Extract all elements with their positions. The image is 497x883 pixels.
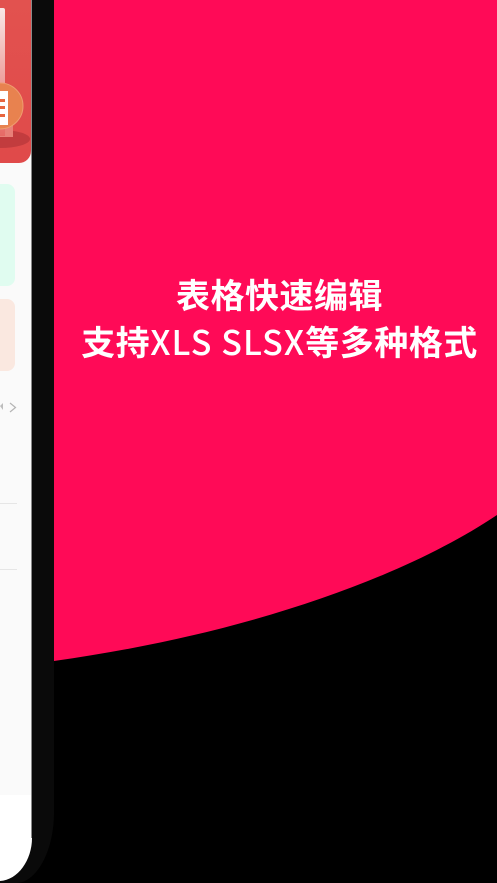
list divider (0, 569, 17, 570)
screen background (0, 0, 31, 795)
document stand (0, 120, 13, 137)
list divider (0, 503, 17, 504)
spreadsheet glyph (0, 91, 8, 125)
chevron icon (10, 403, 16, 412)
phone bezel (0, 0, 54, 883)
phone screen (0, 0, 32, 881)
partial label glyph (0, 403, 3, 410)
spreadsheet rows (0, 99, 5, 117)
red banner (0, 0, 31, 163)
phone mockup (0, 0, 54, 883)
pink curved panel (54, 0, 497, 661)
green card (0, 184, 15, 286)
document illustration (0, 8, 5, 136)
peach card (0, 299, 15, 371)
headline: 表格快速编辑 (176, 269, 383, 318)
banner shadow (0, 130, 30, 148)
subheadline: 支持XLS SLSX等多种格式 (81, 316, 478, 365)
orange circle icon (0, 83, 23, 129)
screen edge (31, 0, 32, 838)
